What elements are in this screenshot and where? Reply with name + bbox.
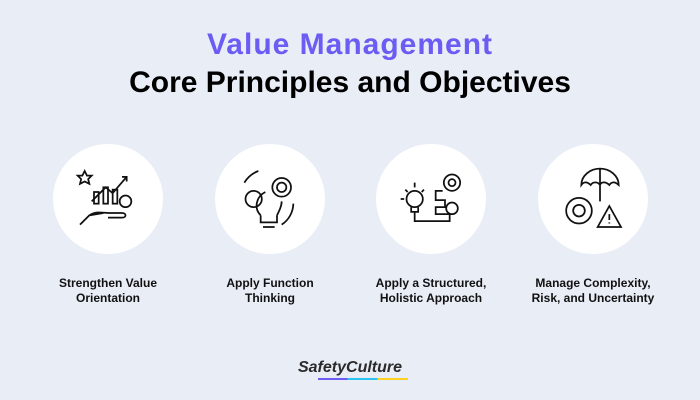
label 2: Apply Function	[226, 276, 314, 290]
label 3: Holistic Approach	[380, 291, 482, 305]
icon: value orientation	[53, 144, 163, 254]
label 2: Thinking	[245, 291, 295, 305]
label 4	[532, 276, 654, 305]
label 4: Manage Complexity,	[535, 276, 651, 290]
label 3: Apply a Structured,	[376, 276, 486, 290]
label 1: Strengthen Value	[59, 276, 157, 290]
label 1	[59, 276, 157, 305]
label 4: Risk, and Uncertainty	[532, 291, 654, 305]
subtitle: Core Principles and Objectives	[129, 66, 571, 99]
logo: SafetyCulture	[298, 359, 402, 376]
label 1: Orientation	[76, 291, 140, 305]
label 2	[226, 276, 314, 305]
title: Value Management	[207, 28, 493, 61]
icon: function thinking	[215, 144, 325, 254]
icon: structured approach	[376, 144, 486, 254]
icon: complexity & risk	[538, 144, 648, 254]
label 3	[376, 276, 486, 305]
